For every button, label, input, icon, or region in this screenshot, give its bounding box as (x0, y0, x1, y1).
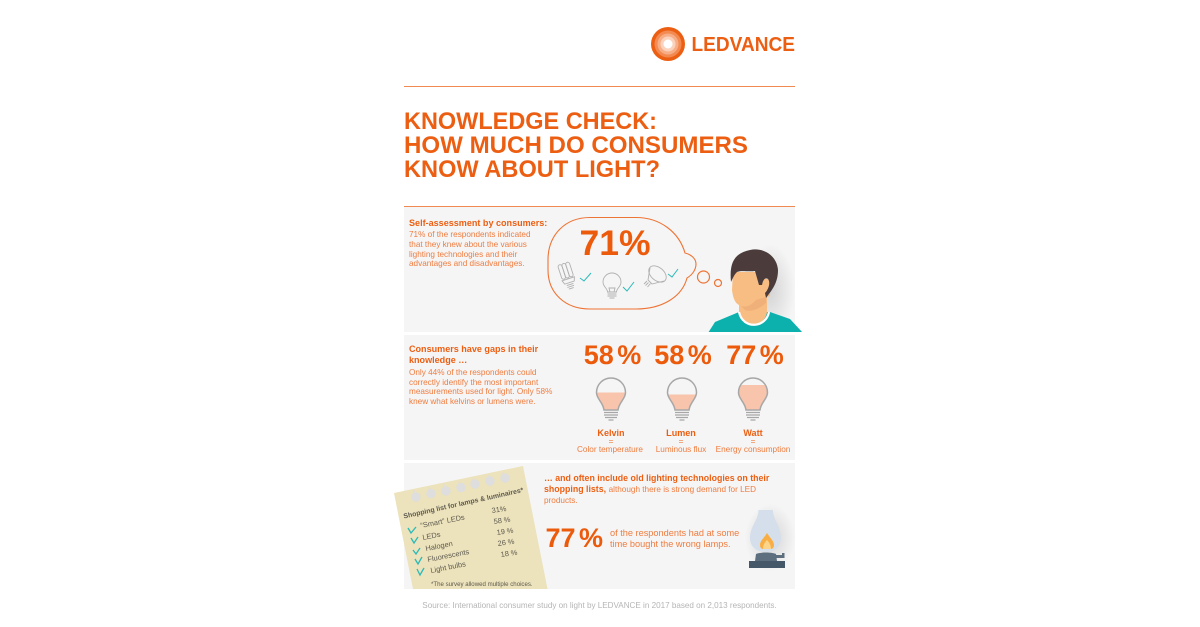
list values: 26 % (497, 537, 515, 548)
list values: 58 % (493, 515, 511, 526)
stat: Kelvin: 58 % (584, 340, 641, 370)
footnote: *The survey allowed multiple choices. (431, 581, 533, 588)
note punch holes (412, 472, 509, 501)
stat: Watt (716, 340, 791, 454)
stat: Kelvin: = (609, 437, 614, 446)
stat: Watt: = (751, 437, 756, 446)
panel: self-assessment (404, 207, 803, 336)
icon: reflector lamp (644, 263, 669, 287)
icon: compact fluorescent lamp (557, 262, 578, 290)
stat: Kelvin: Kelvin (597, 428, 625, 438)
list items: Fluorescents (427, 547, 470, 564)
wrong lamps text: of the respondents had at some (610, 528, 739, 538)
self-assessment text: 71% of the respondents indicated (409, 230, 531, 239)
person (708, 249, 802, 332)
stat: Lumen: = (679, 437, 684, 446)
hair (731, 249, 778, 298)
logo (651, 27, 795, 61)
stat: Watt: 77 % (726, 340, 784, 370)
icon: check 2 (623, 282, 634, 291)
shirt (708, 312, 803, 333)
self-assessment text: advantages and disadvantages. (409, 259, 525, 268)
stat: Lumen: 58 % (654, 340, 712, 370)
shopping intro text: shopping lists, (544, 484, 606, 494)
list items: Light bulbs (430, 559, 467, 575)
list values: 19 % (496, 526, 514, 537)
gaps text: Consumers have gaps in their (409, 344, 539, 354)
shopping intro text: although there is strong demand for LED (609, 485, 756, 494)
neck and face (732, 272, 770, 324)
gaps text: knew what kelvins or lumens were. (409, 397, 536, 406)
logo wordmark: LEDVANCE (692, 34, 795, 56)
stat: Watt: Energy consumption (716, 445, 791, 454)
icon: oil lamp (745, 504, 795, 572)
list checks (408, 527, 424, 575)
list heading: Shopping list for lamps & luminaires* (403, 487, 524, 520)
self-assessment text: Self-assessment by consumers: (409, 218, 547, 228)
stat: Watt: Watt (743, 428, 763, 438)
list values (491, 504, 518, 559)
note paper (394, 466, 548, 589)
icon: check 1 (580, 273, 591, 281)
icon: bulb 77% (737, 378, 769, 420)
icon: bulb 58% (595, 378, 627, 420)
icon: light bulb (603, 273, 621, 298)
stat: Kelvin (577, 340, 643, 454)
title: KNOWLEDGE CHECK: (404, 108, 657, 135)
person shadow (754, 255, 789, 316)
gaps text: Only 44% of the respondents could (409, 368, 537, 377)
stat: Kelvin: Color temperature (577, 445, 643, 454)
list values: 18 % (500, 548, 518, 559)
shopping list note (394, 466, 548, 589)
wrong lamps text: time bought the wrong lamps. (610, 539, 731, 549)
stat: Lumen: Luminous flux (656, 445, 706, 454)
icon: check 3 (668, 269, 678, 277)
gaps text: correctly identify the most important (409, 378, 539, 387)
list items (420, 513, 470, 575)
panel: shopping lists (394, 463, 795, 589)
logo mark (651, 27, 685, 61)
source note: Source: International consumer study on light by LEDVANCE in 2017 based on 2,013 respondents. (422, 601, 777, 610)
77% figure: 77 % (546, 523, 603, 553)
stat: Lumen (654, 340, 712, 454)
gaps text (409, 344, 552, 406)
title: HOW MUCH DO CONSUMERS (404, 132, 748, 159)
list values: 31% (491, 504, 507, 515)
self-assessment text: that they knew about the various (409, 240, 527, 249)
shopping intro text: products. (544, 496, 578, 505)
gaps text: knowledge … (409, 355, 467, 365)
list items: “Smart” LEDs (420, 513, 466, 530)
list items: LEDs (422, 530, 441, 542)
collar (739, 312, 769, 325)
thought bubble (548, 218, 696, 309)
shopping intro text: … and often include old lighting technologies on their (544, 473, 770, 483)
stat: Lumen: Lumen (666, 428, 696, 438)
panel: knowledge gaps (404, 335, 795, 460)
self-assessment text: lighting technologies and their (409, 250, 518, 259)
gaps text: measurements used for light. Only 58% (409, 387, 552, 396)
icon: bulb 58% (666, 378, 698, 420)
71% figure: 71% (580, 223, 651, 263)
thought circles (698, 271, 722, 286)
self-assessment text (409, 218, 547, 268)
title: KNOW ABOUT LIGHT? (404, 156, 660, 183)
list items: Halogen (425, 539, 453, 553)
